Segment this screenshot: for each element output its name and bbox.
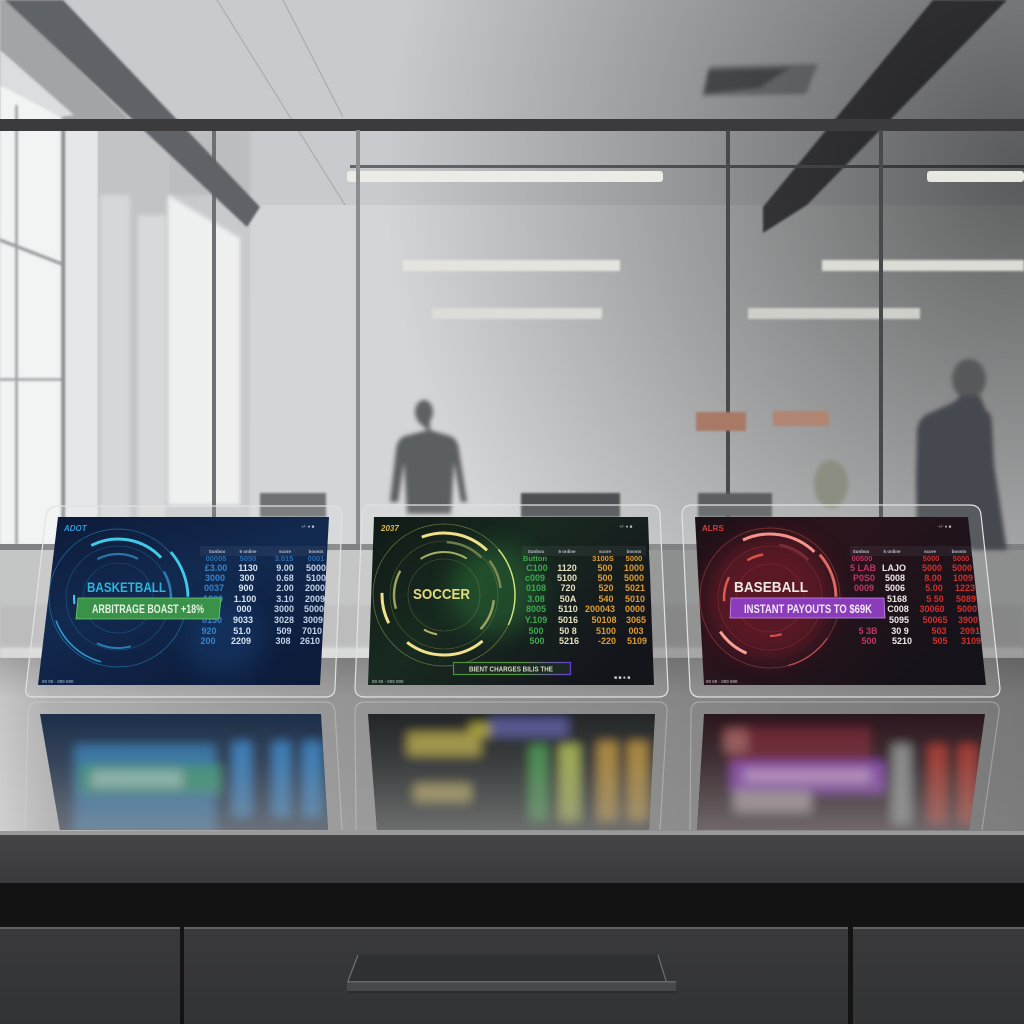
odds table: 3009	[303, 615, 323, 625]
odds table: 2.00	[276, 583, 294, 593]
logo: ALRS	[702, 524, 724, 533]
odds table: score	[924, 549, 936, 554]
odds table: 0001	[308, 554, 324, 563]
odds table: 5000	[957, 604, 977, 614]
footer: 00 00 · 000 000	[372, 679, 404, 684]
odds table: 5110	[558, 604, 578, 614]
odds table: 5 LAB	[850, 563, 876, 573]
odds table: 5000	[306, 563, 326, 573]
odds table: 5168	[887, 594, 907, 604]
ring gauge	[344, 495, 544, 695]
left window	[0, 85, 65, 546]
top status: +/- ● ■	[938, 524, 952, 529]
odds table: 5016	[558, 615, 578, 625]
shadow gap	[0, 883, 1024, 1024]
odds table: C008	[887, 604, 909, 614]
odds table: 5 online	[883, 549, 901, 554]
odds table: 509	[276, 626, 292, 636]
ceiling beams	[5, 0, 260, 227]
odds table: 5100	[306, 573, 326, 583]
footer: 00 00 · 000 000	[706, 679, 738, 684]
odds table: C100	[526, 563, 548, 573]
cabinet right door	[853, 928, 1024, 1024]
odds table: 503	[931, 626, 947, 636]
odds table: 200043	[585, 604, 615, 614]
odds table: 5000	[953, 554, 969, 563]
odds table: 5210	[892, 636, 912, 646]
glass frame	[682, 505, 1000, 697]
odds table: 5000	[952, 563, 972, 573]
ring gauge	[673, 501, 867, 695]
green glow	[450, 545, 540, 635]
odds table: 5000	[626, 554, 642, 563]
callout banner outline	[454, 662, 570, 674]
odds table: 500	[528, 626, 544, 636]
odds table: 5100	[557, 573, 577, 583]
odds table: 500	[861, 636, 877, 646]
odds table: 5 online	[239, 549, 257, 554]
logo: ADOT	[63, 524, 88, 533]
green callout banner	[76, 598, 221, 619]
odds table: 5.00	[925, 583, 943, 593]
odds table: 900	[238, 583, 254, 593]
cabinets	[0, 927, 1024, 1024]
second window	[168, 195, 240, 505]
odds table: 0150	[202, 615, 222, 625]
green callout banner: ARBITRAGE BOAST +18%	[92, 604, 204, 616]
top status: +/- ● ■	[301, 524, 315, 529]
odds table: 0009	[854, 583, 874, 593]
odds table: 50A	[560, 594, 577, 604]
odds table	[850, 546, 981, 646]
odds table: 300	[239, 573, 255, 583]
odds table: 5008	[885, 573, 905, 583]
monitors behind	[260, 493, 772, 517]
horizontal frame bar	[0, 119, 1024, 131]
odds table: 5095	[889, 615, 909, 625]
odds table: P0S0	[853, 573, 875, 583]
odds table: score	[279, 549, 291, 554]
odds table: 1120	[557, 563, 577, 573]
odds table: 5006	[885, 583, 905, 593]
screen	[38, 517, 329, 685]
sport title: BASEBALL	[734, 580, 808, 596]
panel: baseball	[673, 501, 1000, 697]
odds table: 5000	[923, 554, 939, 563]
odds table: 50 8	[559, 626, 577, 636]
odds table: 0108	[526, 583, 546, 593]
odds table: 5089	[956, 594, 976, 604]
screen	[368, 517, 654, 685]
reflection: soccer panel	[368, 714, 655, 830]
odds table: 540	[598, 594, 614, 604]
reflection: basketball panel	[40, 714, 328, 830]
odds table: 3028	[274, 615, 294, 625]
odds table: Button	[523, 554, 547, 563]
odds table: -220	[598, 636, 616, 646]
countertop front edge	[0, 835, 1024, 883]
glass frame	[26, 506, 342, 697]
odds table: 500	[529, 636, 545, 646]
odds table: 3065	[626, 615, 646, 625]
cabinet center door	[184, 928, 848, 1024]
odds table: 50108	[591, 615, 617, 625]
pier and side wall	[65, 130, 98, 550]
odds table: 00005	[206, 554, 226, 563]
odds table: 505	[932, 636, 948, 646]
odds table: 5109	[627, 636, 647, 646]
odds table: 0000	[625, 604, 645, 614]
odds table: 8005	[526, 604, 546, 614]
odds table: 1.100	[234, 594, 256, 604]
odds table: 00500	[852, 554, 872, 563]
footer icons: ■ ■ ● ■	[614, 675, 630, 681]
odds table: 1000	[624, 563, 644, 573]
odds table: 520	[598, 583, 614, 593]
ring gauge	[19, 499, 217, 697]
odds table: 5 50	[926, 594, 944, 604]
odds table: 1000	[203, 594, 223, 604]
odds table: 720	[560, 583, 576, 593]
ceiling lights	[347, 171, 1024, 182]
odds table: 7010	[302, 626, 322, 636]
odds table: Y.109	[525, 615, 547, 625]
odds table: 9.00	[276, 563, 294, 573]
screen	[695, 517, 986, 685]
odds table: boosts	[627, 549, 642, 554]
room shading toward the right	[0, 0, 1024, 660]
odds table: 5 3B	[858, 626, 878, 636]
odds table: 5021	[625, 583, 645, 593]
reflection: glass frames	[25, 702, 999, 830]
odds table: £3.00	[205, 563, 227, 573]
wall posters	[696, 411, 829, 431]
odds table: 50065	[922, 615, 948, 625]
odds table: 500	[597, 563, 613, 573]
panel: basketball	[19, 499, 342, 697]
odds table: 9033	[233, 615, 253, 625]
odds table: 3000	[205, 573, 225, 583]
odds table: boosts	[309, 549, 324, 554]
odds table: 3.10	[276, 594, 294, 604]
odds table: 308	[275, 636, 291, 646]
countertop	[0, 658, 1024, 836]
lower glass band and desks	[0, 544, 1024, 550]
odds table: 2209	[231, 636, 251, 646]
odds table: 30060	[919, 604, 945, 614]
odds table: 1130	[238, 563, 258, 573]
footer: 00 00 · 000 000	[42, 679, 74, 684]
odds table: 2610	[300, 636, 320, 646]
person silhouette: right	[916, 359, 1007, 550]
glass frame	[355, 505, 668, 697]
callout banner outline: BIENT CHARGES BILIS THE	[469, 664, 553, 674]
odds table: LAJO	[882, 563, 906, 573]
odds table: 3.08	[527, 594, 545, 604]
odds table: score	[599, 549, 611, 554]
odds table: 920	[201, 626, 217, 636]
odds table: 200	[200, 636, 216, 646]
odds table: boosts	[952, 549, 967, 554]
ceiling panel seams	[217, 0, 345, 205]
odds table: 2091	[960, 626, 980, 636]
person silhouette: left	[390, 400, 467, 514]
odds table	[200, 546, 326, 646]
background: blurred office room	[0, 0, 1024, 660]
red glow	[708, 536, 832, 660]
odds table: 0037	[204, 583, 224, 593]
odds table: 8.00	[924, 573, 942, 583]
odds table: 2000	[305, 583, 325, 593]
odds table: 3100S	[592, 554, 614, 563]
odds table: 5000	[624, 573, 644, 583]
top status: +/- ● ■	[619, 524, 633, 529]
glass partition posts	[356, 130, 360, 560]
odds table: Sunbox	[528, 549, 545, 554]
odds table: 5100	[596, 626, 616, 636]
odds table: 003	[628, 626, 644, 636]
odds table: Sunbox	[209, 549, 226, 554]
odds table: 3.015	[275, 554, 293, 563]
odds table: 5000	[304, 604, 324, 614]
reflection: baseball panel	[697, 714, 985, 830]
panel: soccer	[344, 495, 668, 697]
odds table	[522, 546, 647, 646]
odds table: 3900	[958, 615, 978, 625]
thin rear rail	[350, 165, 1024, 168]
odds table: c009	[525, 573, 545, 583]
odds table: 0.68	[276, 573, 294, 583]
cabinet left door	[0, 928, 180, 1024]
odds table: 30 9	[891, 626, 909, 636]
odds table: 2009	[305, 594, 325, 604]
odds table: 500	[597, 573, 613, 583]
purple callout banner	[730, 598, 885, 618]
screen glow	[185, 600, 265, 680]
logo: 2037	[380, 524, 399, 533]
odds table: 51.0	[233, 626, 251, 636]
cabinet handle	[347, 955, 676, 993]
odds table: 1009	[953, 573, 973, 583]
odds table: 1223	[955, 583, 975, 593]
upper left wall	[0, 0, 130, 120]
odds table: Sunbox	[853, 549, 870, 554]
odds table: 5010	[625, 594, 645, 604]
odds table: 000	[236, 604, 252, 614]
vent	[702, 64, 818, 96]
purple callout banner: INSTANT PAYOUTS TO $69K	[744, 604, 873, 616]
odds table: 3109	[961, 636, 981, 646]
odds table: 5050	[240, 554, 256, 563]
odds table: 3000	[274, 604, 294, 614]
plant	[814, 460, 848, 508]
odds table: 5216	[559, 636, 579, 646]
sport title: BASKETBALL	[87, 579, 166, 595]
odds table: 5000	[922, 563, 942, 573]
sport title: SOCCER	[413, 586, 470, 603]
odds table: 5 online	[558, 549, 576, 554]
